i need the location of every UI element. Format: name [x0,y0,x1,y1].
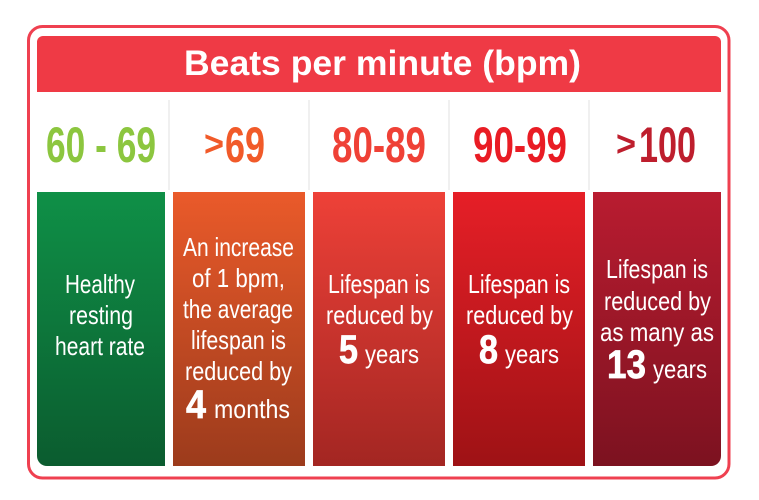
range label: 60 - 69: 60 - 69 [46,117,156,173]
card: 8 years reduction: 8 [479,328,498,372]
card: 8 years reduction [453,192,585,466]
column: 80-89 bpm [313,117,445,466]
card: 13 years reduction: years [653,354,707,384]
range label: >100: > [616,123,636,164]
card: 5 years reduction [313,192,445,466]
card: healthy resting heart rate: Healthy [65,269,135,299]
column: over 69 bpm [173,117,305,466]
card: 8 years reduction: reduced by [466,300,573,330]
card: healthy resting heart rate: resting [69,300,133,330]
card: 13 years reduction: 13 [607,343,646,387]
range label: >100 [616,117,696,173]
range label: >69: > [204,123,224,164]
card: healthy resting heart rate: heart rate [55,331,145,361]
card: 4 months reduction: the average [183,294,293,324]
card: 5 years reduction: Lifespan is [328,269,430,299]
range label: 80-89: 80-89 [332,117,426,173]
card: healthy resting heart rate [37,192,165,466]
heading: title banner: Beats per minute (bpm) [184,44,581,83]
column: 60-69 bpm [37,117,165,466]
card: 4 months reduction [173,192,305,466]
card: 8 years reduction: Lifespan is [468,269,570,299]
card: 5 years reduction: 5 [339,328,358,372]
card: 4 months reduction: of 1 bpm, [192,263,285,293]
card: 4 months reduction: lifespan is [191,325,286,355]
card: 4 months reduction: reduced by [185,356,292,386]
card: 4 months reduction: An increase [183,232,294,262]
card: 4 months reduction: 4 [186,383,207,427]
range label: >69: 69 [225,117,265,173]
range label: >69 [204,117,265,173]
card: 13 years reduction: Lifespan is [606,254,708,284]
card: 13 years reduction: as many as [600,317,714,347]
card: 5 years reduction: years [365,339,419,369]
column: over 100 bpm [593,117,721,466]
card: 5 years reduction: reduced by [326,300,433,330]
card: 13 years reduction [593,192,721,466]
range label: 90-99: 90-99 [473,117,567,173]
column: 90-99 bpm [453,117,585,466]
card: 4 months reduction: months [214,394,290,424]
range label: >100: 100 [639,117,696,173]
heading: title banner [37,36,721,92]
card: 8 years reduction: years [505,339,559,369]
card: 13 years reduction: reduced by [604,286,711,316]
